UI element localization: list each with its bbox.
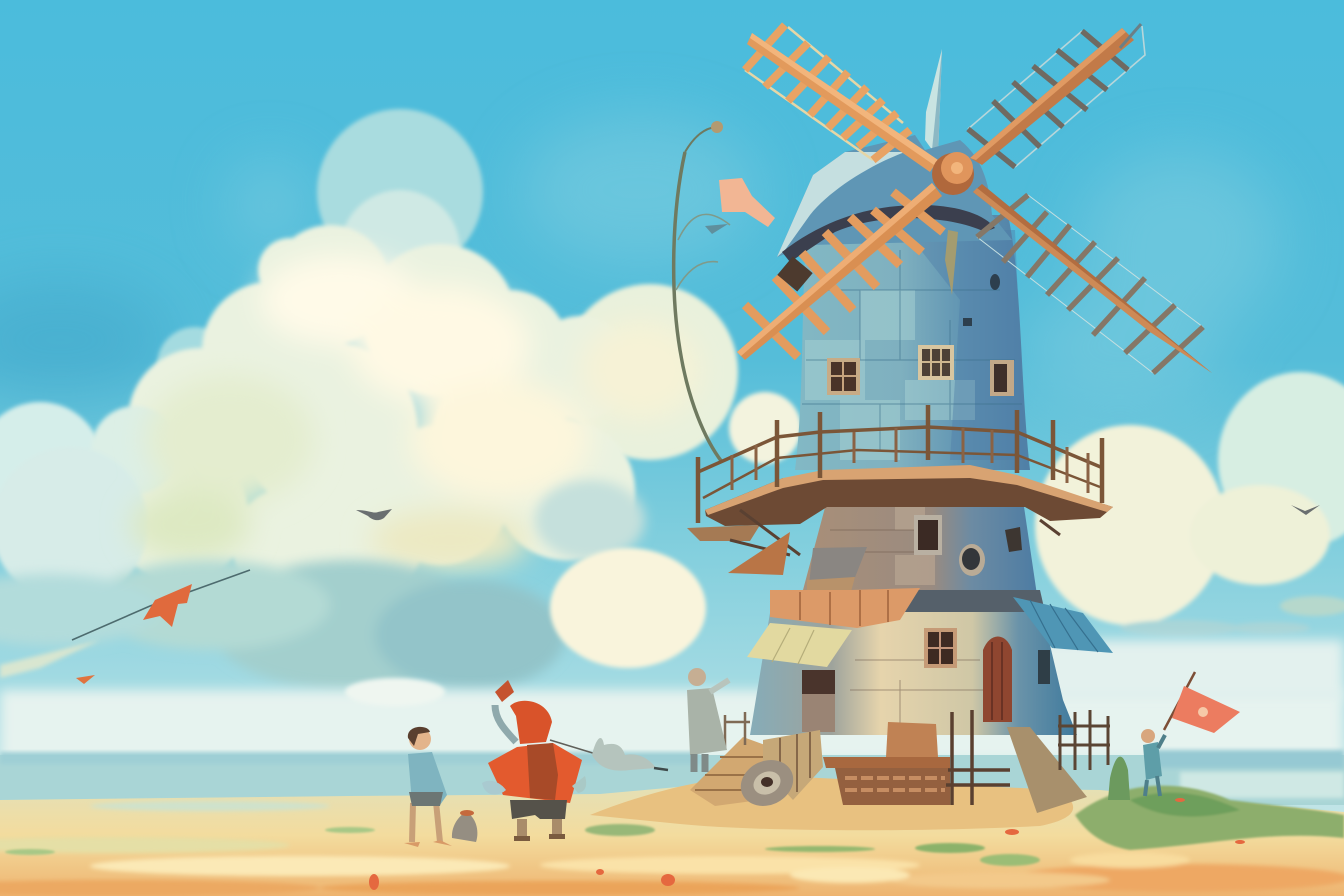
child in red coat: [482, 680, 596, 841]
tall kite pole with pennant: [674, 121, 775, 462]
red kite, left, with string: [72, 570, 250, 684]
blue side roof: [1013, 597, 1113, 653]
dome cap and spire: [777, 49, 1012, 295]
green grass patches: [5, 786, 1344, 866]
lower tower: [750, 500, 1077, 735]
stairs, barrel, and base clutter: [690, 710, 1130, 814]
birds: [356, 505, 1320, 520]
faint high clouds: [230, 115, 1280, 410]
sail: upper left: [745, 25, 938, 172]
person near windmill: [687, 668, 729, 772]
main cumulus cloud, left: [0, 109, 801, 690]
sandy beach ground: [0, 785, 1344, 896]
sail: lower left: [737, 183, 943, 360]
tower windows: [827, 274, 1014, 396]
sea band: [0, 755, 1344, 805]
small awning and wooden boards: [728, 532, 920, 667]
pale horizon haze: [0, 690, 1344, 762]
sail: lower right: [973, 184, 1212, 373]
windmill tower upper: [795, 215, 1030, 470]
round window: [959, 544, 985, 576]
mound under the windmill: [590, 775, 1073, 830]
balcony railing: [698, 405, 1103, 523]
windmill sails: [737, 24, 1212, 373]
child in blue: [404, 727, 452, 847]
sail: upper right: [968, 24, 1145, 167]
scattered flowers and speckles: [369, 798, 1245, 890]
lower windows: [914, 515, 942, 555]
sail hub: [932, 152, 974, 195]
bundle and string: [592, 738, 668, 771]
sack on sand: [452, 810, 477, 842]
balcony underside and deck: [687, 465, 1113, 555]
right side clouds: [1035, 372, 1344, 636]
right child with red flag: [1141, 672, 1240, 796]
door: [983, 636, 1012, 722]
